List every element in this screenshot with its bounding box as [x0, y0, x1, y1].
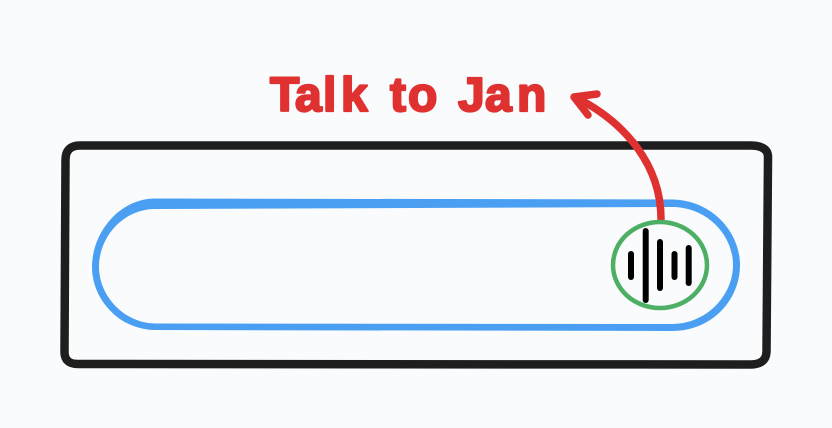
- green circle: [613, 222, 707, 308]
- waveform bars: [631, 231, 689, 300]
- label: Talk to Jan: to: [390, 69, 437, 122]
- label: Talk to Jan: Talk: [270, 69, 368, 122]
- panel: outer black frame: [64, 146, 768, 364]
- icon: voice button: [613, 222, 707, 308]
- arrow: red curve to label: [574, 94, 661, 219]
- panel: blue pill input: [92, 198, 740, 331]
- label: Talk to Jan: Jan: [458, 69, 546, 122]
